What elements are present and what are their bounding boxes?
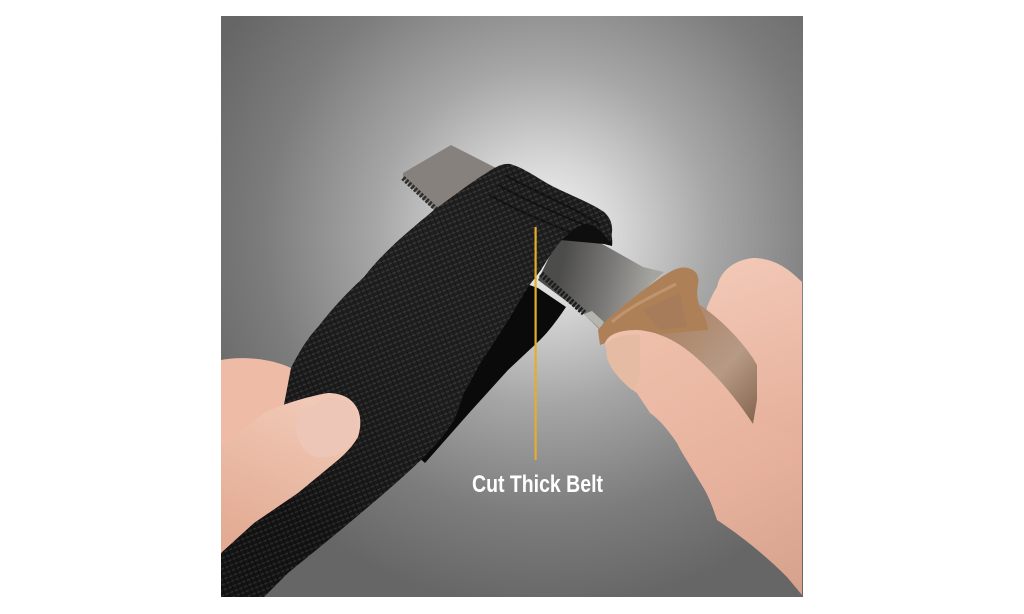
icon: left thumb <box>221 393 360 553</box>
photo background panel <box>221 16 803 597</box>
callout line <box>534 227 537 460</box>
icon: knife handle <box>598 267 757 424</box>
icon: belt back strip <box>410 280 566 463</box>
icon: belt inner loop <box>560 220 612 246</box>
icon: black woven belt <box>221 164 612 597</box>
callout label: Cut Thick Belt <box>472 471 603 498</box>
icon: knife blade <box>403 145 664 330</box>
icon: left hand finger <box>221 358 291 447</box>
icon: right hand fingers <box>700 258 802 480</box>
icon: right thumb and palm <box>605 330 802 595</box>
